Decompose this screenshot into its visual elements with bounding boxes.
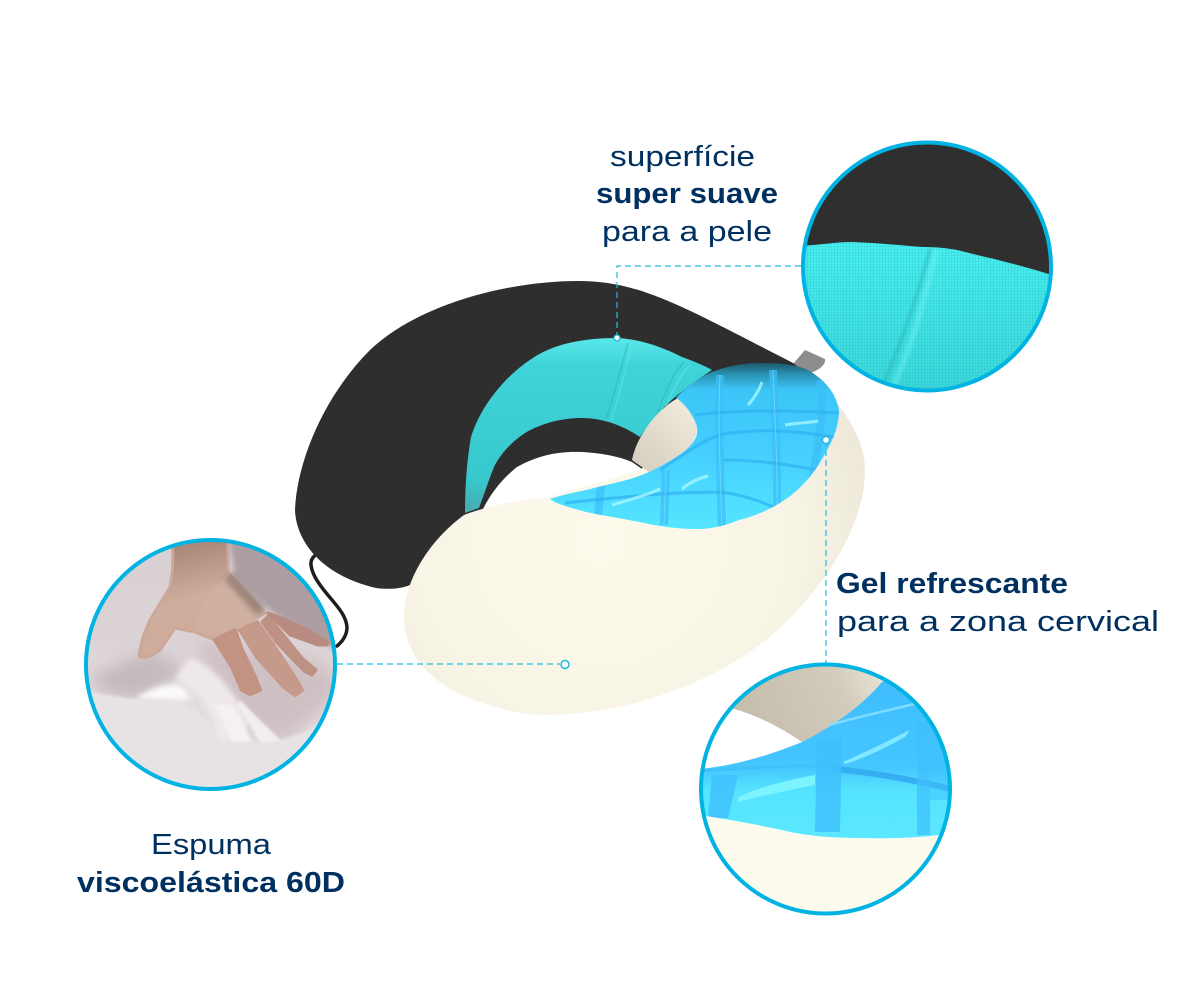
cord bbox=[311, 549, 347, 646]
detail circle: gel close-up bbox=[699, 660, 960, 920]
hand bbox=[139, 535, 328, 695]
text: memory foam: viscoelástica 60D bbox=[77, 867, 345, 899]
inner cream bump bbox=[632, 398, 697, 472]
grey tab bbox=[793, 350, 825, 373]
text: memory foam bbox=[77, 829, 345, 899]
text: memory foam: Espuma bbox=[151, 829, 272, 861]
black cushion bbox=[295, 281, 815, 589]
turquoise band bbox=[465, 338, 712, 513]
marker: surface bbox=[614, 335, 620, 341]
text: soft surface: para a pele bbox=[602, 216, 772, 248]
text: soft surface bbox=[596, 141, 778, 248]
marker: foam bbox=[561, 660, 569, 668]
cream memory foam body bbox=[404, 390, 865, 715]
detail circle: fabric bbox=[800, 140, 1055, 395]
text: cooling gel: para a zona cervical bbox=[837, 606, 1159, 638]
text: cooling gel bbox=[836, 568, 1159, 638]
blue cooling gel bbox=[550, 363, 840, 530]
marker: gel bbox=[822, 436, 830, 444]
text: soft surface: super suave bbox=[596, 178, 778, 210]
detail circle: hand on foam bbox=[84, 535, 345, 795]
text: soft surface: superfície bbox=[610, 141, 755, 173]
white centre hole bbox=[478, 452, 655, 520]
connector lines bbox=[337, 266, 826, 664]
text: cooling gel: Gel refrescante bbox=[836, 568, 1068, 600]
pillow illustration bbox=[295, 281, 865, 715]
